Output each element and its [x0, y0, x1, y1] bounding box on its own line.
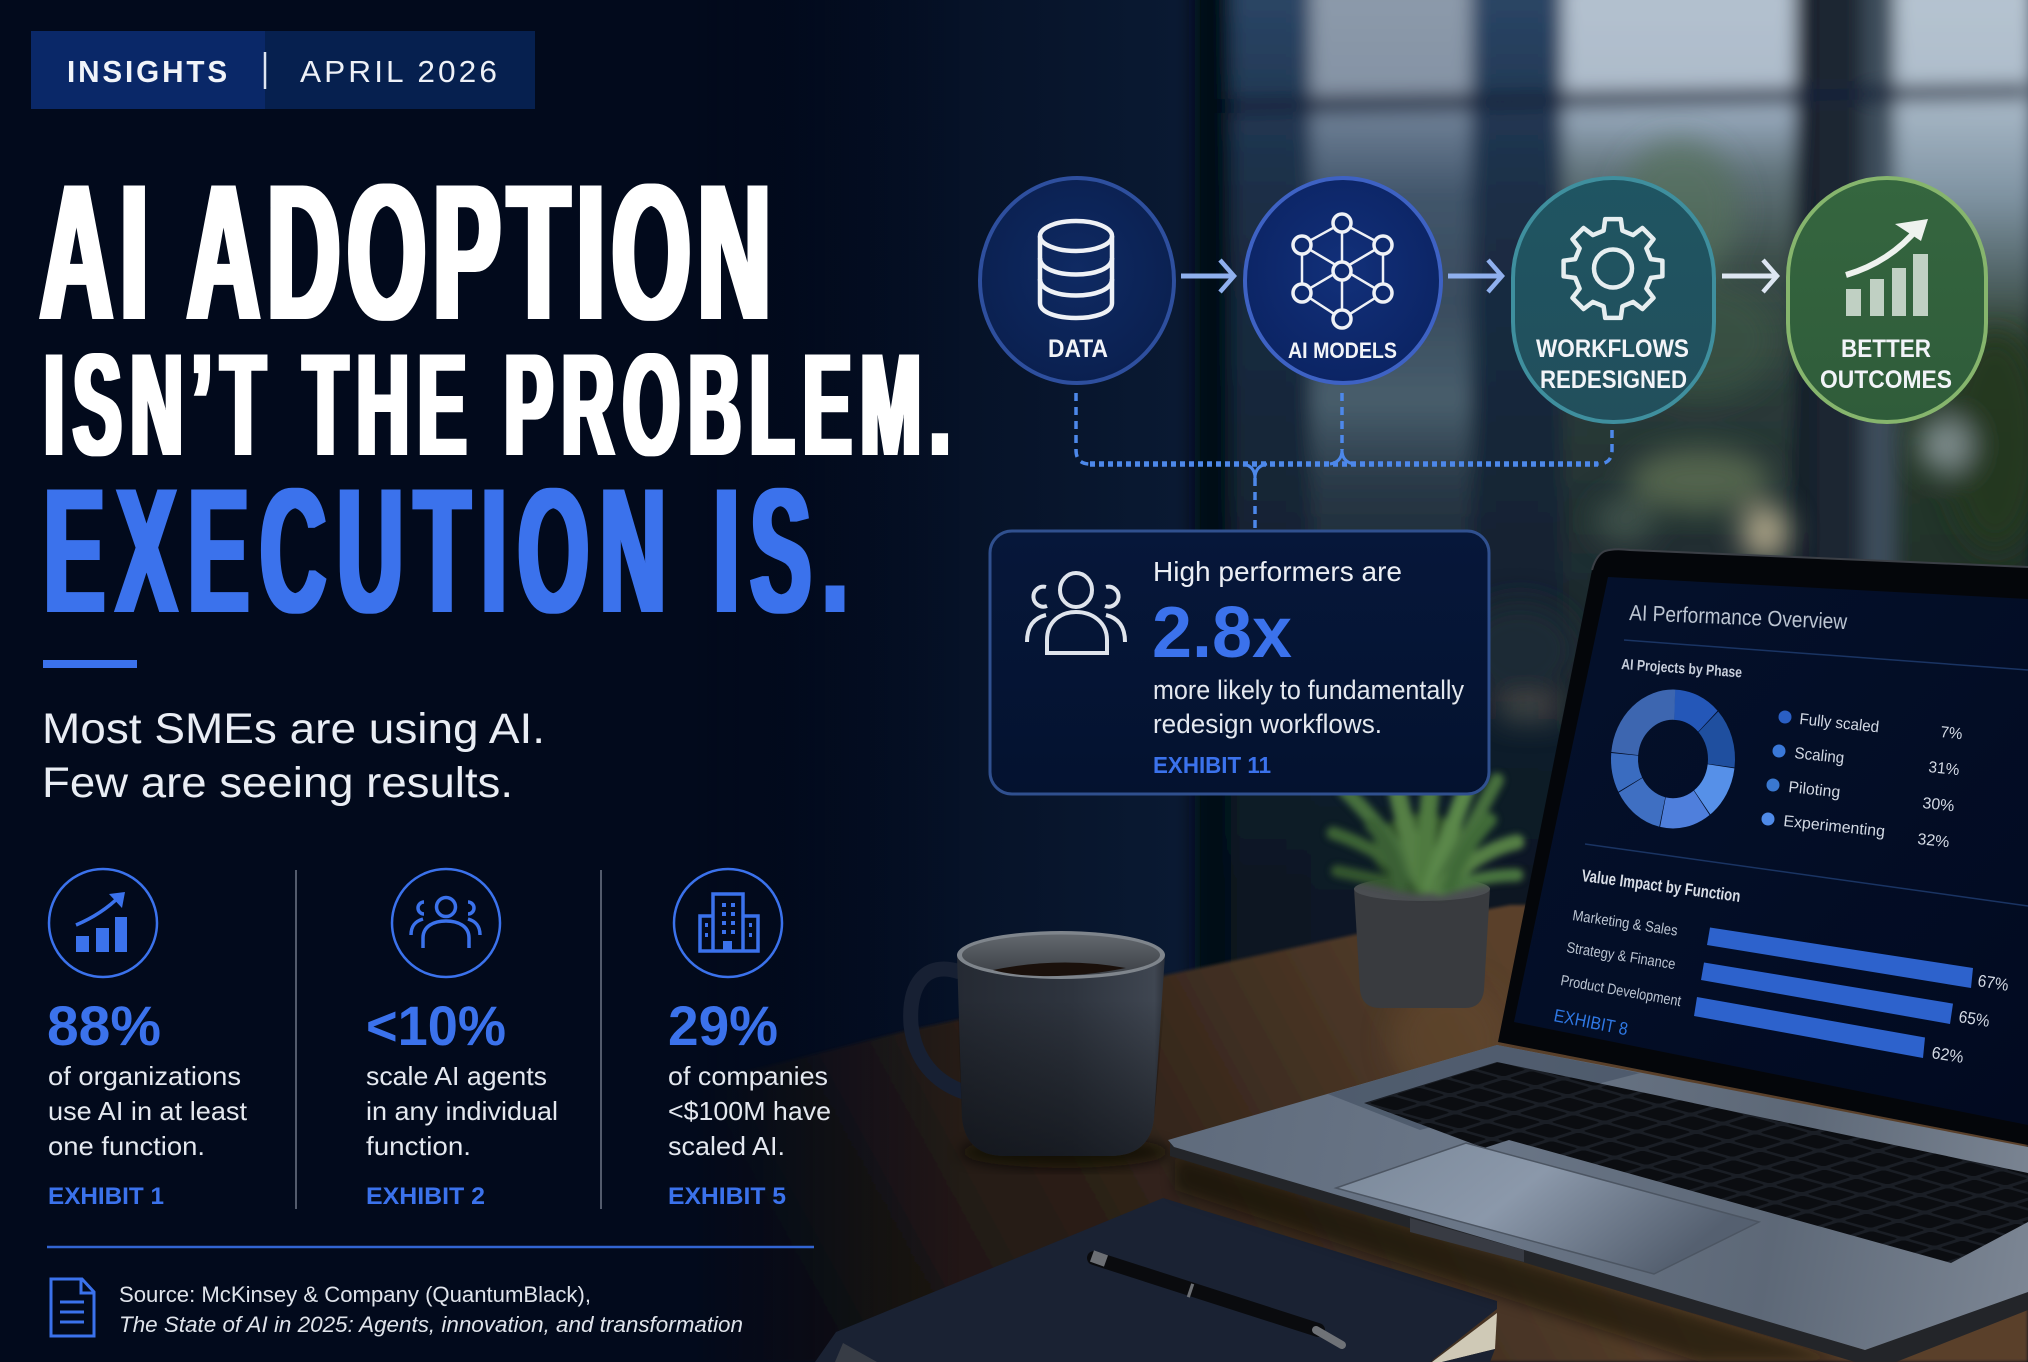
source note: Source: McKinsey & Company (QuantumBlack),	[119, 1282, 591, 1307]
screen title: AI Performance Overview	[1629, 600, 1848, 634]
bar chart: 67%	[1976, 971, 2010, 995]
bar chart: Product Development	[1559, 972, 1683, 1010]
header badge	[31, 31, 535, 109]
stat: 29%: scaled AI.	[668, 1131, 785, 1161]
subtitle	[42, 705, 545, 807]
stat: 29%: EXHIBIT 5	[668, 1183, 786, 1210]
stat: <10%: EXHIBIT 2	[366, 1183, 485, 1210]
bar chart: 62%	[1930, 1043, 1965, 1067]
icon: database	[1040, 221, 1112, 318]
laptop base	[1170, 1140, 2028, 1362]
arrow: models to workflows	[1448, 260, 1502, 292]
flow step: better outcomes: BETTER	[1841, 335, 1931, 363]
flow step: AI models: AI MODELS	[1288, 338, 1397, 363]
bar chart heading: Value Impact by Function	[1580, 866, 1742, 906]
bar chart: 65%	[1957, 1007, 1991, 1031]
stat: 88%: EXHIBIT 1	[48, 1183, 164, 1210]
flow step: data: DATA	[1048, 335, 1108, 363]
arrow: workflows to outcomes	[1722, 260, 1777, 292]
laptop shadow	[1175, 1155, 1850, 1362]
main title	[40, 144, 959, 650]
stat: 88%: use AI in at least	[48, 1096, 248, 1126]
subtitle: Few are seeing results.	[42, 759, 513, 807]
flow step: AI models	[1245, 178, 1441, 383]
stat: 88%: of organizations	[48, 1061, 241, 1091]
header badge: INSIGHTS	[67, 54, 230, 89]
callout: high performers: High performers are	[1153, 556, 1402, 587]
icon: gear	[1564, 219, 1662, 318]
trackpad	[1336, 1143, 1759, 1274]
callout: high performers	[990, 531, 1489, 794]
stat: 29%: <$100M have	[668, 1096, 831, 1126]
donut legend: Experimenting	[1783, 813, 1886, 841]
donut legend: Fully scaled	[1799, 711, 1880, 736]
arrow: data to models	[1181, 260, 1234, 292]
icon: network	[1293, 214, 1392, 328]
donut subtitle: AI Projects by Phase	[1621, 656, 1743, 681]
keyboard	[1364, 1062, 2028, 1263]
donut legend: 7%	[1940, 724, 1963, 743]
icon: team	[1027, 573, 1125, 653]
flow step: workflows redesigned	[1513, 178, 1714, 422]
flow step: workflows redesigned: REDESIGNED	[1540, 366, 1687, 394]
bar chart: Marketing & Sales	[1571, 907, 1679, 940]
infographic canvas: ISN’T THE PROBLEM.	[44, 323, 959, 486]
main title: AI ADOPTION	[40, 144, 778, 361]
icon: growth chart	[1846, 219, 1928, 316]
notebook and pen	[815, 1198, 1497, 1362]
icon: rising chart	[49, 869, 157, 977]
stat: 88%: 88%	[47, 994, 161, 1057]
laptop	[1168, 549, 2028, 1362]
donut legend: 30%	[1922, 795, 1955, 815]
dashed connectors	[1076, 393, 1612, 529]
stat: 88%	[47, 869, 248, 1210]
stat: 29%: of companies	[668, 1061, 828, 1091]
donut legend: 31%	[1928, 759, 1960, 779]
left dark panel fade	[0, 0, 960, 1362]
coffee mug	[911, 931, 1170, 1168]
stat: <10%: function.	[366, 1131, 471, 1161]
bar chart: Strategy & Finance	[1565, 939, 1677, 973]
stat: 29%: 29%	[668, 994, 778, 1057]
potted plant	[1333, 780, 1517, 1008]
main title: EXECUTION IS.	[44, 451, 859, 650]
stat: 29%	[668, 869, 831, 1210]
donut legend: Piloting	[1788, 779, 1841, 801]
subtitle: Most SMEs are using AI.	[42, 705, 545, 753]
callout: high performers: redesign workflows.	[1153, 709, 1382, 739]
stat: <10%: in any individual	[366, 1096, 558, 1126]
desk	[640, 905, 2028, 1362]
source note	[51, 1279, 743, 1337]
flow step: workflows redesigned: WORKFLOWS	[1536, 335, 1689, 363]
stat: <10%	[366, 869, 558, 1210]
flow step: better outcomes	[1788, 178, 1986, 422]
icon: document	[51, 1279, 94, 1336]
icon: people group	[392, 869, 500, 977]
title accent rule	[43, 660, 137, 668]
icon: office buildings	[674, 869, 782, 977]
header badge: APRIL 2026	[300, 54, 500, 89]
donut legend: Scaling	[1794, 745, 1845, 767]
stat: <10%: scale AI agents	[366, 1061, 547, 1091]
laptop lid	[1498, 549, 2028, 1145]
source note: The State of AI in 2025: Agents, innovation, and transformation	[119, 1312, 743, 1337]
bar chart	[1559, 907, 2010, 1067]
blurred window	[1195, 0, 2028, 980]
flow step: data	[980, 178, 1174, 383]
callout: high performers: more likely to fundamentally	[1153, 675, 1464, 705]
donut chart	[1604, 682, 1742, 836]
donut legend: 32%	[1917, 831, 1950, 851]
exhibit 8 label: EXHIBIT 8	[1552, 1005, 1630, 1039]
blurred trees	[1460, 140, 2028, 722]
callout: high performers: EXHIBIT 11	[1153, 752, 1271, 778]
stat: 88%: one function.	[48, 1131, 205, 1161]
donut legend	[1762, 710, 1963, 851]
stat: <10%: <10%	[366, 994, 506, 1057]
callout: high performers: 2.8x	[1152, 593, 1292, 673]
flow step: better outcomes: OUTCOMES	[1820, 366, 1952, 394]
